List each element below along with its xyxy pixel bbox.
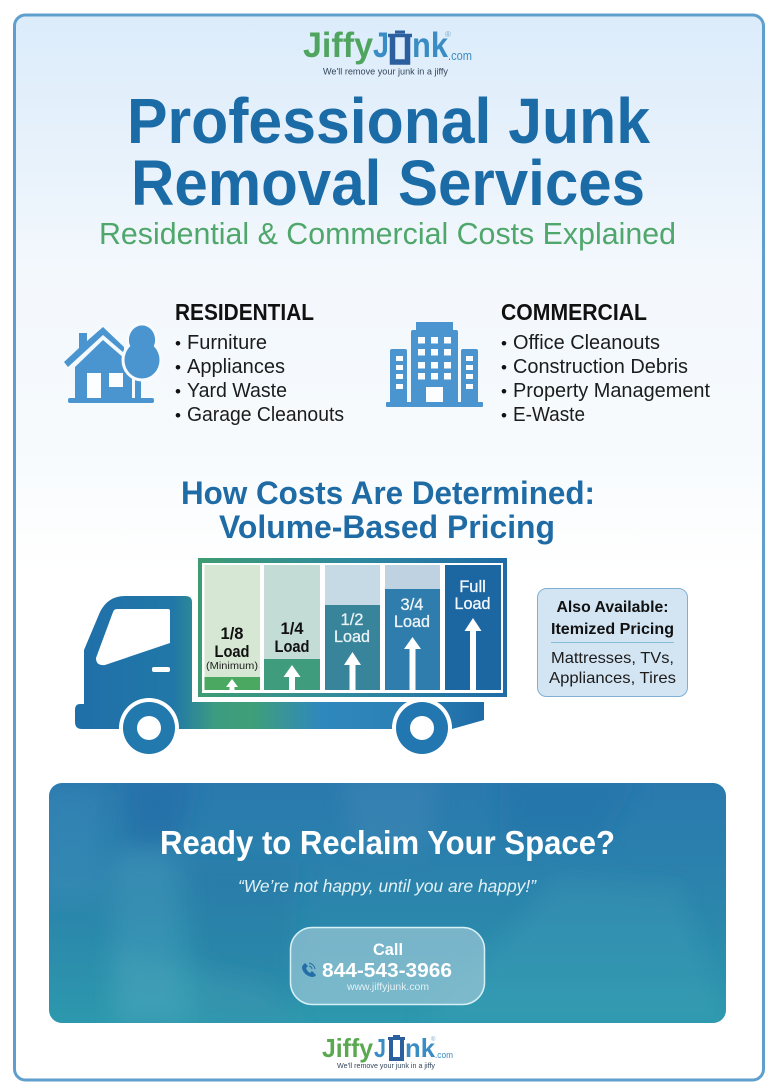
logo: top (303, 26, 472, 78)
cab window (96, 609, 170, 665)
callout: itemized pricing: Appliances, Tires (549, 670, 676, 687)
logo: bottom (322, 1033, 453, 1070)
rear wheel (392, 698, 452, 758)
panel: commercial: Office Cleanouts (513, 332, 660, 354)
panel: residential: • (175, 382, 181, 401)
panel: commercial: COMMERCIAL (501, 299, 647, 325)
call button (290, 928, 484, 1004)
panel: residential: • (175, 334, 181, 353)
callout: itemized pricing: Itemized Pricing (551, 621, 674, 638)
column: 1/4 load: 1/4 (281, 620, 304, 638)
front wheel (119, 698, 179, 758)
panel: commercial: E-Waste (513, 404, 585, 426)
panel: commercial: • (501, 382, 507, 401)
icon: office building (386, 322, 483, 407)
column: 1/2 load (325, 565, 380, 691)
icon: phone (302, 963, 316, 977)
cta heading: Ready to Reclaim Your Space? (160, 824, 615, 861)
logo: top: We'll remove your junk in a jiffy (323, 66, 448, 78)
column: full load (445, 565, 501, 691)
panel: commercial (501, 299, 710, 426)
call button: Call (373, 941, 403, 959)
column: 1/8 load: (Minimum) (206, 660, 258, 672)
panel: residential: • (175, 406, 181, 425)
truck body (75, 596, 484, 729)
column: 1/2 load: Load (334, 628, 370, 646)
logo: bottom: .com (435, 1050, 453, 1061)
callout: itemized pricing: Also Available: (556, 599, 668, 616)
logo: top: Jiffy (303, 26, 374, 65)
door handle (152, 667, 170, 672)
column: 3/4 load: Load (394, 613, 430, 631)
panel: commercial: • (501, 358, 507, 377)
call button: 844-543-3966 (322, 959, 452, 982)
panel: residential: Yard Waste (187, 380, 287, 402)
panel: residential: • (175, 358, 181, 377)
icon: house and tree (64, 326, 160, 403)
panel: commercial: • (501, 334, 507, 353)
title: Professional Junk (127, 85, 650, 157)
call button: www.jiffyjunk.com (346, 982, 429, 993)
panel: commercial: Property Management (513, 380, 710, 402)
logo: top: nk (412, 26, 448, 65)
panel: residential: Furniture (187, 332, 267, 354)
column: full load: Full (459, 578, 486, 596)
column: 1/2 load: 1/2 (341, 611, 363, 629)
logo: top: .com (448, 49, 472, 63)
panel: call to action (40, 775, 726, 1023)
column: 1/8 load: 1/8 (221, 625, 243, 643)
panel: residential: Appliances (187, 356, 285, 378)
truck diagram (75, 558, 507, 758)
cta quote: “We’re not happy, until you are happy!” (238, 876, 537, 896)
callout: itemized pricing (538, 588, 688, 696)
panel: commercial: • (501, 406, 507, 425)
heading: how costs are determined: Volume-Based Pricing (219, 509, 555, 545)
heading: how costs are determined: How Costs Are Determined: (181, 475, 595, 511)
logo: bottom: Jiffy (322, 1033, 374, 1063)
title (127, 85, 650, 219)
column: 1/4 load (264, 565, 320, 691)
column: 1/8 load: Load (214, 643, 250, 661)
heading: how costs are determined (181, 475, 595, 545)
subtitle: Residential & Commercial Costs Explained (99, 217, 676, 251)
panel: residential: Garage Cleanouts (187, 404, 344, 426)
column: 1/4 load: Load (274, 638, 310, 656)
column: 1/8 load (204, 565, 260, 690)
logo: bottom: We'll remove your junk in a jiffy (337, 1061, 435, 1070)
logo: bottom: ® (431, 1036, 436, 1043)
panel: residential: RESIDENTIAL (175, 299, 314, 325)
logo: bottom: J (374, 1033, 386, 1063)
column: full load: Load (454, 595, 490, 613)
logo: top: J (373, 26, 389, 65)
panel: residential (175, 299, 344, 426)
callout: itemized pricing: Mattresses, TVs, (551, 650, 674, 667)
column: 3/4 load (385, 565, 440, 691)
title: Removal Services (131, 147, 645, 219)
column: 3/4 load: 3/4 (401, 596, 423, 614)
logo: bottom: nk (405, 1033, 436, 1063)
cargo box (198, 558, 507, 697)
panel: commercial: Construction Debris (513, 356, 688, 378)
logo: top: ® (445, 30, 451, 39)
icon: trash can letter u (388, 1036, 405, 1059)
icon: trash can letter u (388, 32, 412, 62)
